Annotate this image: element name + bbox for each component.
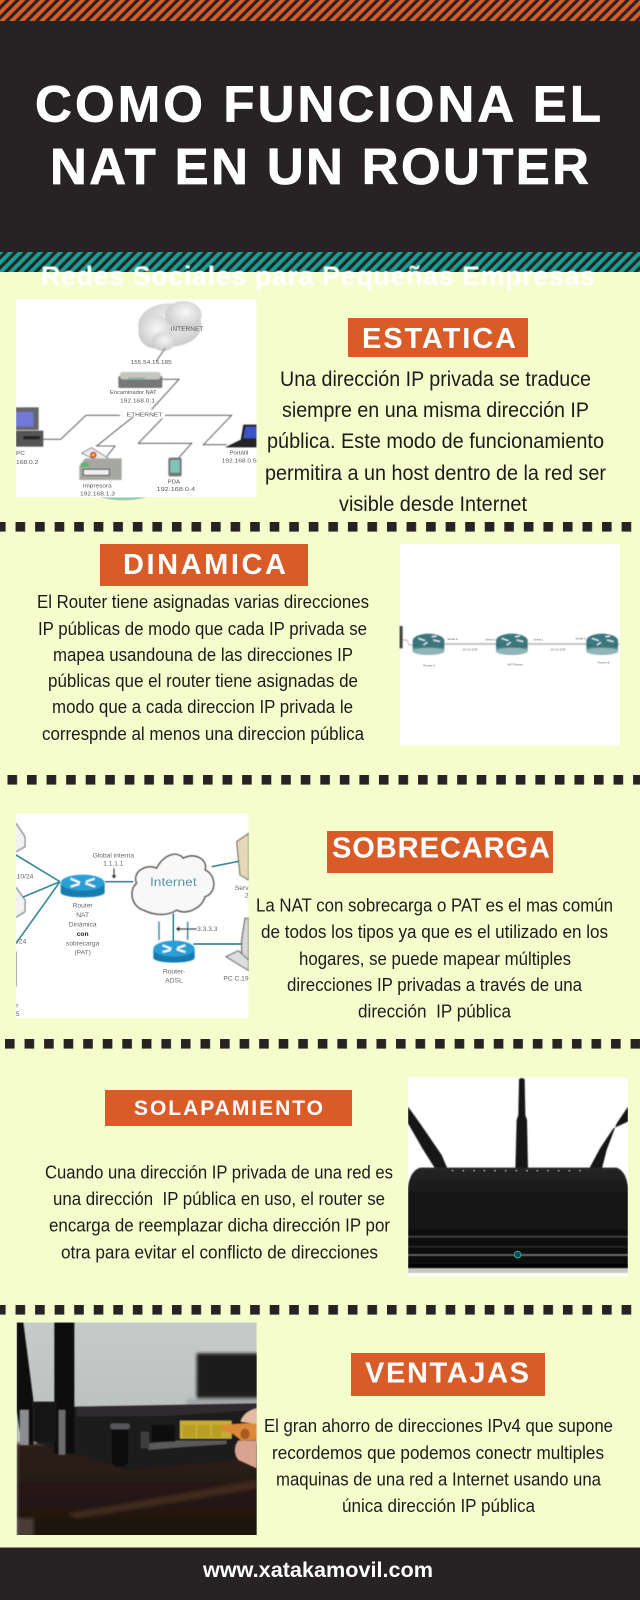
website url: www.xatakamovil.com	[202, 1558, 433, 1582]
diagram: NAT with overload: 1.1.1.1	[103, 861, 124, 868]
diagram: three routers: NAT Router	[507, 662, 523, 666]
diagram: NAT with overload	[16, 814, 249, 1018]
diagram: NAT network: 192.168.0.4	[157, 487, 195, 493]
text: solapamiento: otra para evitar el conflicto de direcciones	[61, 1242, 378, 1262]
panel: ventajas	[17, 1322, 613, 1540]
diagram: three routers	[399, 544, 620, 746]
text: estatica	[265, 368, 606, 516]
diagram: NAT network: PC	[16, 451, 25, 457]
text: ventajas: recordemos que podemos conectr multiples	[272, 1442, 604, 1463]
subtitle: Redes Sociales para Pequeñas Empresas	[41, 261, 595, 291]
image: black wifi router	[408, 1078, 628, 1277]
heading: ventajas	[351, 1353, 545, 1396]
diagram: three routers: Router A	[423, 664, 435, 668]
text: dinamica: públicas que el router tiene asignadas de	[48, 670, 358, 691]
diagram: NAT with overload: Dinámica	[69, 922, 97, 929]
heading: ventajas: VENTAJAS	[365, 1358, 529, 1390]
diagram: NAT with overload: Global interna	[93, 852, 134, 859]
text: estatica: siempre en una misma dirección IP	[282, 399, 589, 422]
title	[35, 76, 601, 195]
diagram: three routers: Serial 0	[575, 636, 586, 640]
orange striped border	[0, 0, 640, 21]
text: dinamica: IP públicas de modo que cada IP privada se	[38, 618, 367, 639]
diagram: three routers: Router B	[598, 660, 609, 664]
diagram: NAT with overload: 10/24	[17, 873, 34, 880]
text: estatica: Una dirección IP privada se traduce	[280, 368, 591, 391]
diagram: NAT with overload: ADSL	[165, 978, 183, 985]
diagram: NAT with overload: Serv	[235, 885, 249, 892]
diagram: NAT network: 192.168.1.3	[80, 492, 115, 498]
text: ventajas: única dirección IP pública	[342, 1495, 536, 1516]
diagram: three routers: Serial 1	[533, 637, 544, 641]
diagram: NAT network: 155.54.15.185	[131, 360, 172, 366]
diagram: NAT with overload: NAT	[76, 912, 89, 919]
panel: estatica	[16, 299, 606, 516]
diagram: NAT with overload: /24	[17, 938, 27, 945]
text: ventajas: El gran ahorro de direcciones IPv4 que supone	[264, 1415, 613, 1436]
diagram: NAT network: INTERNET	[171, 327, 204, 333]
diagram: NAT network: PDA	[168, 479, 180, 485]
text: dinamica: El Router tiene asignadas varias direcciones	[37, 591, 369, 612]
panel: sobrecarga	[16, 814, 613, 1022]
text: dinamica: modo que a cada direccion IP privada le	[52, 696, 353, 717]
footer	[0, 1548, 640, 1600]
heading: dinamica	[100, 544, 308, 586]
diagram: NAT network: Portátil	[229, 450, 248, 456]
header band	[0, 0, 640, 272]
diagram: NAT with overload: con	[77, 931, 89, 938]
text: sobrecarga: direcciones IP privadas a través de una	[287, 974, 583, 995]
diagram: NAT network: 192.168.0.5	[222, 459, 257, 465]
diagram: NAT with overload: Internet	[150, 875, 197, 889]
text: dinamica	[37, 591, 369, 744]
diagram: NAT with overload: 2	[245, 893, 249, 900]
panel: dinamica	[37, 544, 620, 746]
text: sobrecarga	[256, 894, 613, 1022]
diagram: NAT network	[16, 299, 257, 500]
diagram: NAT with overload: r	[16, 1002, 19, 1009]
diagram: NAT network: ETHERNET	[127, 413, 163, 419]
diagram: NAT network: Encaminador NAT	[110, 390, 157, 396]
text: solapamiento	[45, 1162, 393, 1262]
title: COMO FUNCIONA EL	[35, 76, 601, 132]
heading: solapamiento	[105, 1090, 352, 1126]
text: sobrecarga: La NAT con sobrecarga o PAT es el mas común	[256, 894, 613, 916]
heading: solapamiento: SOLAPAMIENTO	[134, 1097, 323, 1120]
text: ventajas: maquinas de una red a Internet usando una	[276, 1468, 602, 1490]
title: NAT EN UN ROUTER	[50, 138, 589, 195]
heading: estatica: ESTATICA	[362, 323, 516, 355]
heading: dinamica: DINAMICA	[123, 549, 286, 581]
diagram: NAT network: 192.168.0.1	[120, 398, 155, 404]
text: sobrecarga: dirección IP pública	[358, 1000, 512, 1022]
diagram: NAT with overload: 5	[16, 1011, 20, 1018]
diagram: three routers: Serial 0	[447, 637, 458, 641]
text: sobrecarga: de todos los tipos ya que es el utilizado en los	[261, 921, 608, 942]
text: dinamica: mapea usandouna de las direcciones IP	[53, 644, 353, 665]
heading: sobrecarga: SOBRECARGA	[332, 832, 550, 864]
text: dinamica: correspnde al menos una direccion pública	[42, 723, 365, 744]
text: solapamiento: una dirección IP pública en uso, el router se	[53, 1188, 385, 1209]
diagram: NAT with overload: sobrecarga	[66, 940, 100, 947]
text: ventajas	[264, 1415, 613, 1516]
diagram: NAT with overload: PC C.19	[223, 975, 249, 982]
text: estatica: visible desde Internet	[339, 493, 527, 516]
text: solapamiento: Cuando una dirección IP privada de una red es	[45, 1162, 393, 1182]
diagram: three routers: Serial 0	[485, 638, 495, 642]
diagram: NAT network: 168.0.2	[16, 460, 38, 466]
text: estatica: permitira a un host dentro de la red ser	[265, 462, 606, 485]
panel: solapamiento	[45, 1078, 628, 1277]
diagram: NAT with overload: (PAT)	[74, 950, 91, 957]
text: solapamiento: encarga de reemplazar dicha dirección IP por	[49, 1214, 390, 1236]
diagram: NAT with overload: 3.3.3.3	[197, 926, 218, 933]
photo: router ports with cable clip	[17, 1322, 260, 1540]
diagram: NAT with overload: Router-	[163, 968, 185, 975]
diagram: three routers: 10.0.0.0/30	[463, 648, 478, 652]
teal striped border	[0, 252, 640, 272]
text: estatica: pública. Este modo de funcionamiento	[267, 430, 604, 453]
diagram: three routers: 10.0.0.0/30	[551, 648, 566, 652]
diagram: NAT with overload: Router	[73, 903, 93, 910]
text: sobrecarga: hogares, se puede mapear múltiples	[299, 948, 571, 969]
diagram: NAT network: Impresora	[83, 484, 113, 490]
